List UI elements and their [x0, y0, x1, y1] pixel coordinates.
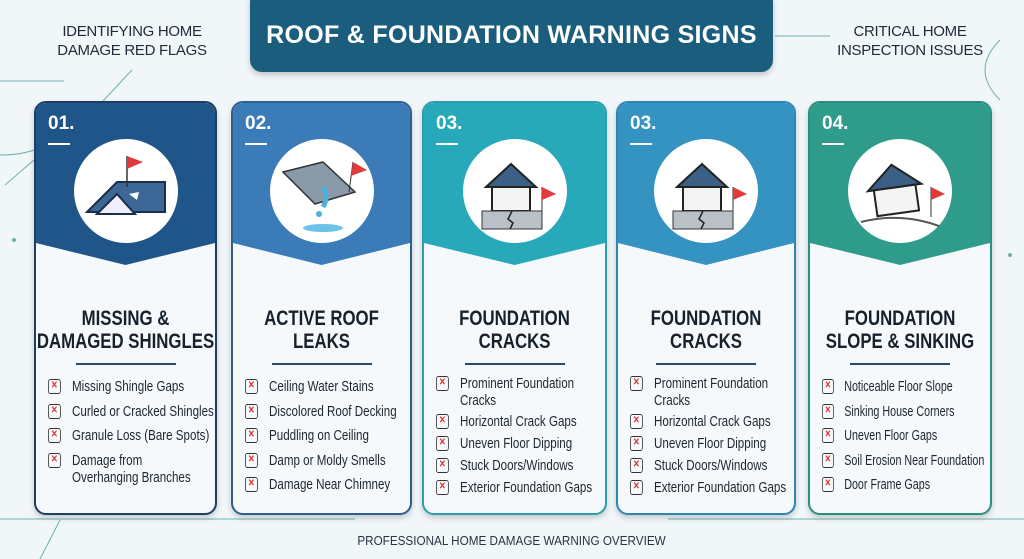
list: Missing Shingle Gaps — [72, 379, 184, 395]
list: Curled or Cracked Shingles — [72, 404, 214, 420]
card 3: 03. — [436, 113, 462, 134]
side text right — [837, 23, 983, 59]
heading — [37, 307, 214, 353]
list: Ceiling Water Stains — [269, 379, 374, 395]
list: Horizontal Crack Gaps — [654, 414, 771, 430]
list: Cracks — [654, 393, 690, 409]
side text left: DAMAGE RED FLAGS — [57, 42, 207, 59]
heading: ACTIVE ROOF — [264, 307, 379, 330]
card 2: 02. — [245, 113, 271, 134]
list: Prominent Foundation — [654, 376, 768, 392]
list: Stuck Doors/Windows — [654, 458, 767, 474]
title banner: ROOF & FOUNDATION WARNING SIGNS — [266, 21, 757, 49]
side text right: INSPECTION ISSUES — [837, 42, 983, 59]
list: Stuck Doors/Windows — [460, 458, 573, 474]
card 5: 04. — [822, 113, 848, 134]
list: Damage from — [72, 452, 142, 468]
heading: CRACKS — [670, 330, 742, 353]
list: Puddling on Ceiling — [269, 428, 369, 444]
list: Horizontal Crack Gaps — [460, 414, 577, 430]
side text left: IDENTIFYING HOME — [62, 23, 202, 40]
list — [436, 376, 592, 496]
list: Exterior Foundation Gaps — [460, 480, 592, 496]
list: Uneven Floor Gaps — [844, 428, 937, 444]
list: Granule Loss (Bare Spots) — [72, 428, 209, 444]
list: Uneven Floor Dipping — [654, 436, 766, 452]
card 2 — [231, 101, 412, 515]
heading — [459, 307, 570, 353]
heading: FOUNDATION — [845, 307, 955, 330]
icon: sinking house — [848, 139, 952, 243]
footer text: PROFESSIONAL HOME DAMAGE WARNING OVERVIEW — [357, 533, 666, 548]
side text right: CRITICAL HOME — [853, 23, 967, 40]
list: Door Frame Gaps — [844, 477, 930, 493]
heading: DAMAGED SHINGLES — [37, 330, 214, 353]
list: Noticeable Floor Slope — [844, 379, 953, 395]
heading: CRACKS — [479, 330, 550, 353]
card 5 — [808, 101, 992, 515]
heading: LEAKS — [293, 330, 350, 353]
list: Sinking House Corners — [844, 404, 955, 420]
heading — [264, 307, 379, 353]
list: Discolored Roof Decking — [269, 404, 397, 420]
card 4: 03. — [630, 113, 656, 134]
heading: FOUNDATION — [651, 307, 761, 330]
list: Damage Near Chimney — [269, 477, 390, 493]
heading — [651, 307, 761, 353]
card 1: 01. — [48, 113, 74, 134]
list: Exterior Foundation Gaps — [654, 480, 786, 496]
list: Soil Erosion Near Foundation — [844, 452, 984, 468]
list — [245, 379, 397, 493]
title banner — [250, 0, 773, 72]
list: Uneven Floor Dipping — [460, 436, 572, 452]
icon: foundation crack — [654, 139, 758, 243]
side text left — [57, 23, 207, 59]
list: Cracks — [460, 393, 496, 409]
heading: MISSING & — [82, 307, 169, 330]
heading — [826, 307, 974, 353]
card 3 — [422, 101, 607, 515]
icon: roof — [74, 139, 178, 243]
heading: SLOPE & SINKING — [826, 330, 974, 353]
icon: foundation crack — [462, 139, 566, 243]
icon: leak — [270, 139, 374, 243]
list: Overhanging Branches — [72, 470, 191, 486]
list — [822, 379, 984, 493]
list: Damp or Moldy Smells — [269, 452, 386, 468]
list — [48, 379, 214, 486]
list — [630, 376, 786, 496]
heading: FOUNDATION — [459, 307, 570, 330]
card 1 — [34, 101, 217, 515]
list: Prominent Foundation — [460, 376, 574, 392]
card 4 — [616, 101, 796, 515]
